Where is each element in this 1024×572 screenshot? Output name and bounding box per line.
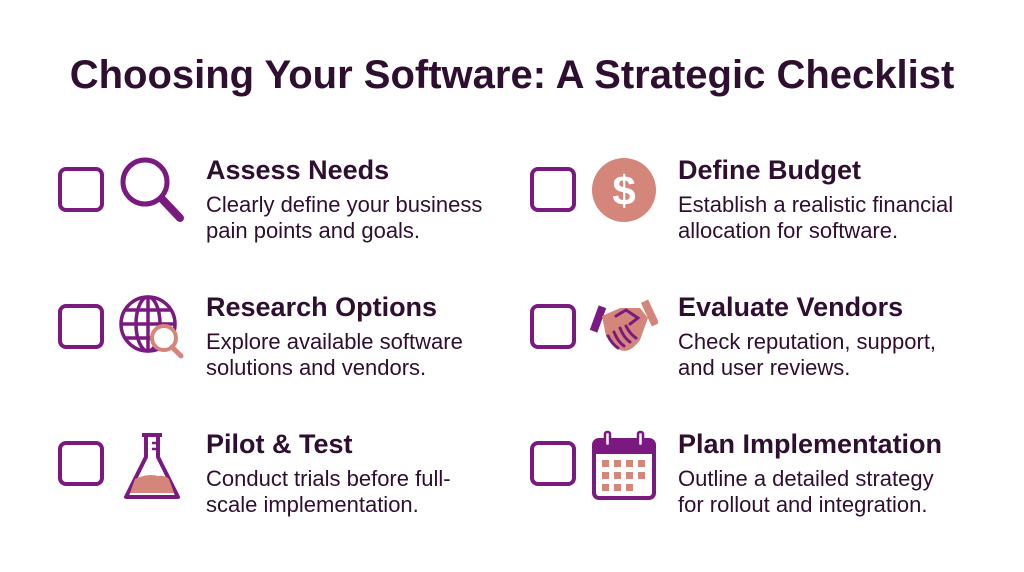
item: define budget: Define Budget — [678, 155, 861, 185]
item: assess needs: pain points and goals. — [206, 218, 420, 243]
item: plan implementation: Plan Implementation — [678, 429, 942, 459]
icon: magnifier — [120, 158, 184, 222]
icon: globe search — [119, 295, 184, 358]
item: evaluate vendors: Check reputation, support, — [678, 329, 936, 354]
title: Choosing Your Software: A Strategic Checklist — [70, 53, 954, 97]
icon: flask — [124, 433, 180, 499]
item: define budget: allocation for software. — [678, 218, 898, 243]
item: research options: solutions and vendors. — [206, 355, 426, 380]
item: pilot test: Pilot & Test — [206, 429, 353, 459]
icon: calendar — [592, 430, 656, 500]
item: plan implementation — [530, 429, 942, 517]
item: evaluate vendors: and user reviews. — [678, 355, 850, 380]
item: assess needs — [58, 155, 482, 243]
item: research options — [58, 292, 463, 380]
item: pilot test: scale implementation. — [206, 492, 419, 517]
item: define budget — [530, 155, 953, 243]
icon: dollar coin: $ — [612, 167, 636, 214]
item: evaluate vendors: Evaluate Vendors — [678, 292, 903, 322]
item: plan implementation: for rollout and integration. — [678, 492, 928, 517]
item: evaluate vendors — [530, 292, 936, 380]
item: assess needs: Clearly define your business — [206, 192, 482, 217]
heading: Assess Needs — [206, 155, 389, 185]
item: pilot test: Conduct trials before full- — [206, 466, 451, 491]
icon: handshake — [590, 300, 658, 351]
item: plan implementation: Outline a detailed strategy — [678, 466, 934, 491]
item: pilot test — [58, 429, 451, 517]
icon: dollar coin — [592, 158, 656, 222]
item: research options: Research Options — [206, 292, 437, 322]
item: define budget: Establish a realistic financial — [678, 192, 953, 217]
item: research options: Explore available software — [206, 329, 463, 354]
